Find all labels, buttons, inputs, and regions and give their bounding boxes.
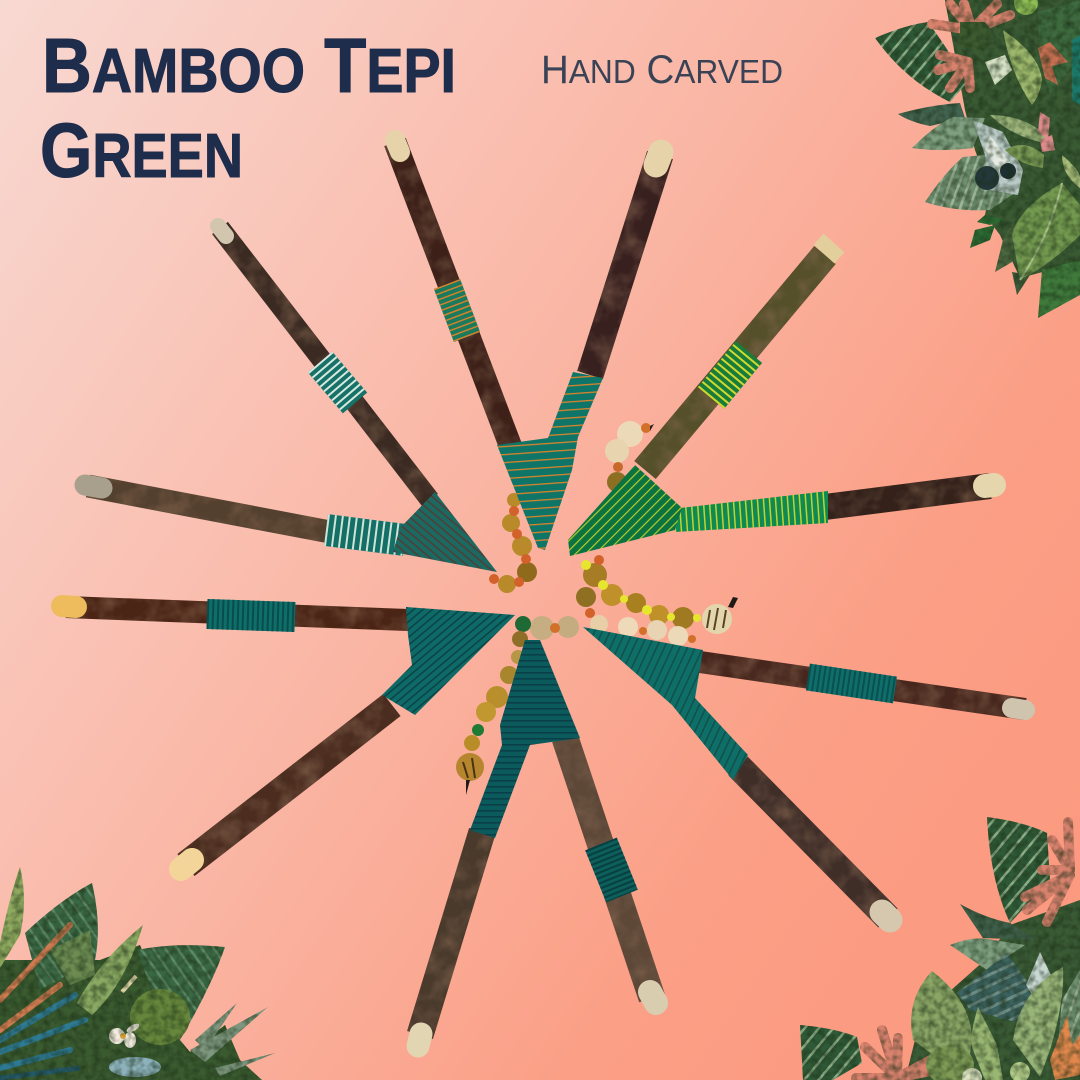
wrapped cone and arm <box>583 627 748 780</box>
strand: cream beads near olive stick <box>605 421 654 492</box>
title: BAMBOO TEPI <box>42 23 456 109</box>
tepi pair: top <box>395 140 661 550</box>
tepi pair: upper right <box>568 243 994 556</box>
stick: pointing right <box>700 662 1025 710</box>
wrapped cone and arm <box>470 640 580 838</box>
stick: dark pointing right <box>825 485 994 507</box>
stick: pointing down right <box>738 766 890 920</box>
subtitle: hand carved: HAND CARVED <box>541 48 783 92</box>
bead strands <box>456 421 738 795</box>
strand: upper left dark beads <box>489 493 537 593</box>
stick: pointing up left <box>395 140 512 450</box>
strand: centre cream beads <box>515 615 696 646</box>
wrapped cone and arm <box>382 607 515 715</box>
tepi pair: upper left <box>85 226 497 572</box>
foliage: top right corner <box>875 0 1080 318</box>
foliage: bottom right corner <box>800 817 1080 1080</box>
title <box>40 23 456 194</box>
stick: pointing down left <box>418 832 482 1046</box>
stick: pointing left <box>62 606 408 620</box>
stick: pointing left <box>85 485 405 540</box>
stick: olive pointing up right <box>645 243 834 470</box>
strand: yellow beads and seed <box>576 555 738 634</box>
wrapped cone <box>393 492 497 572</box>
wrapped cone <box>497 372 603 550</box>
title: GREEN <box>40 108 243 194</box>
foliage: bottom left corner <box>0 867 275 1080</box>
tepi pair: bottom <box>418 640 656 1046</box>
tepi pair: lower right <box>583 627 1025 920</box>
tepi pair: left <box>62 606 515 869</box>
wrapped cone <box>568 465 682 556</box>
stick: pointing up right <box>590 152 661 375</box>
stick: pointing down right <box>565 738 656 1003</box>
wrapped arm <box>675 491 828 532</box>
stick: pointing down left <box>181 705 392 869</box>
strand: lower left beads and seed <box>456 631 528 795</box>
stick: pointing up left <box>218 226 430 500</box>
